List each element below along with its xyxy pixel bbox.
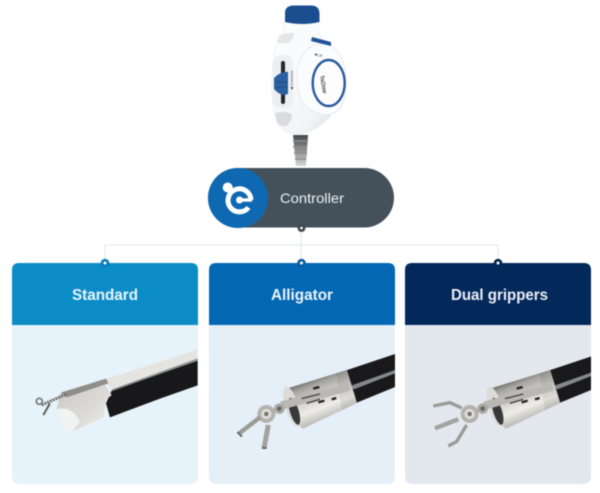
cap (285, 6, 320, 24)
instrument: alligator tip (237, 354, 395, 448)
small label: ◀ Lift (314, 52, 323, 58)
ring dial (313, 60, 345, 106)
label: Controller (280, 190, 344, 206)
device body (272, 20, 346, 134)
node (494, 259, 502, 267)
panel header (405, 263, 591, 325)
side slot and thumb wheel (273, 55, 293, 108)
node (101, 259, 109, 267)
pill background (208, 168, 394, 228)
instrument: standard tip (36, 349, 198, 432)
heading: Dual grippers (451, 287, 548, 304)
panel: alligator (209, 259, 395, 484)
controller pill (208, 168, 394, 232)
panel header (12, 263, 198, 325)
panel header (209, 263, 395, 325)
blue circle (208, 168, 268, 228)
panel: dual grippers (405, 259, 598, 484)
icon: logo (223, 182, 252, 212)
top button (311, 37, 331, 46)
brand label: TruClosur (318, 75, 327, 94)
connector lines (105, 228, 498, 263)
icon: controller handset (272, 6, 346, 166)
side buttons (277, 33, 294, 43)
face plate (297, 44, 346, 115)
panel body (12, 325, 198, 484)
cable (293, 135, 308, 166)
heading: Alligator (271, 287, 333, 304)
heading: Standard (72, 287, 138, 304)
node (297, 259, 306, 267)
side label: ◀ Connect (289, 70, 294, 90)
panel body (209, 325, 395, 484)
panel body (405, 325, 591, 484)
pill node (298, 224, 306, 232)
instrument: dual gripper tip (433, 354, 598, 446)
panel: standard (12, 259, 198, 484)
